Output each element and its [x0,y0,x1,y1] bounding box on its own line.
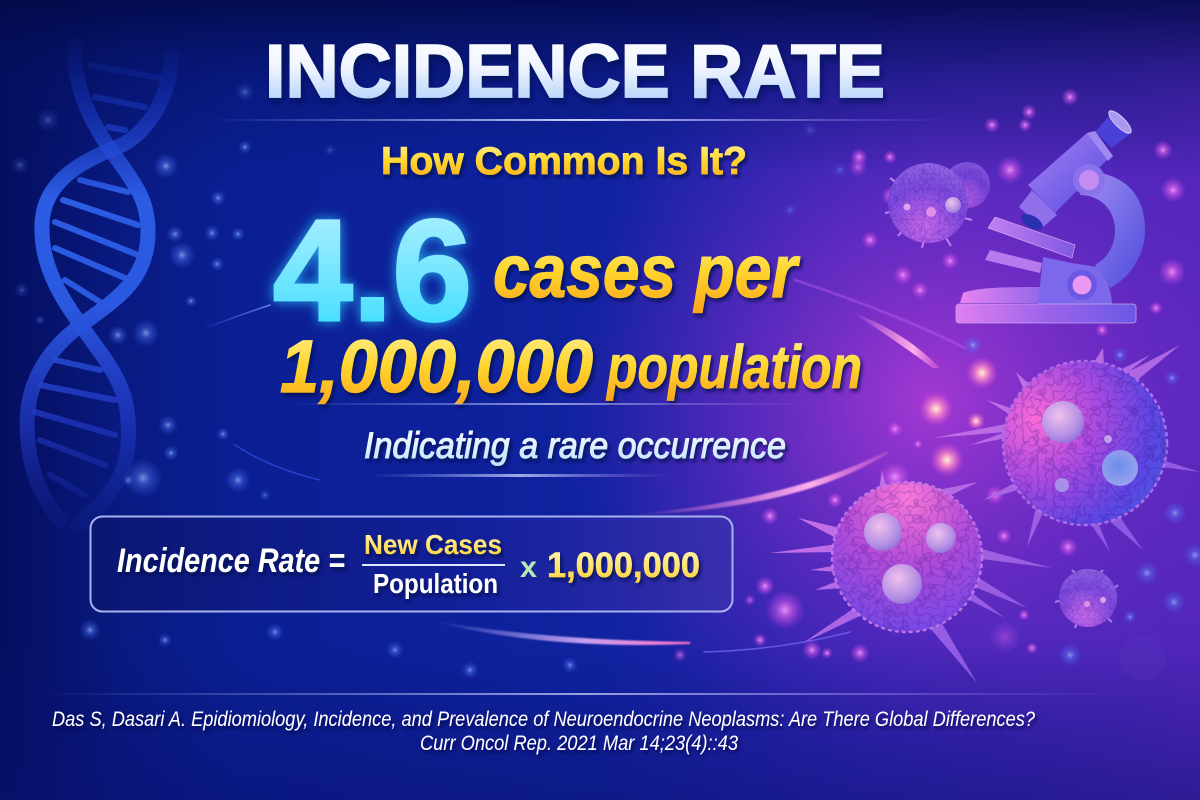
light streaks [200,280,965,652]
icon: large cell right [933,345,1200,552]
cases per: cases per [493,229,800,313]
microscope cap [1106,108,1134,136]
citation line two: Curr Oncol Rep. 2021 Mar 14;23(4)::43 [420,732,738,755]
icon: cell cluster top [885,162,990,248]
microscope focus knob [1073,164,1105,196]
microscope objective [1019,190,1057,228]
nuclei [1042,401,1084,443]
microscope tube [1028,133,1110,213]
microscope eyepiece [1095,115,1132,148]
microscope foot [960,287,1040,303]
icon: small cell [1055,569,1118,628]
footer divider [40,693,1130,695]
title divider [210,119,950,121]
rarity note: Indicating a rare occurrence [364,425,786,466]
glowing particles [11,82,1200,679]
multiplier: 1,000,000 [547,546,700,585]
numerator: New Cases [364,529,502,560]
citation line one: Das S, Dasari A. Epidiomiology, Incidence, and Prevalence of Neuroendocrine Neoplasms: Are There Global Differences? [52,708,1035,731]
spikes [933,345,1200,552]
formula label: Incidence Rate = [117,542,345,580]
icon: microscope [956,108,1145,323]
icon: faint cells [990,622,1166,681]
microscope lens [1019,211,1045,233]
icon: DNA helix [27,45,172,525]
microscope collar [1087,131,1113,161]
formula panel [90,516,732,612]
microscope lower stage [985,250,1042,273]
fraction bar [362,564,505,566]
spikes [770,470,1052,683]
icon: large cell left [770,470,1052,683]
divider [370,474,670,477]
citation [52,708,1035,755]
subtitle: How Common Is It? [381,140,747,183]
one million: 1,000,000 [280,325,593,408]
microscope pillar [1038,257,1112,304]
microscope stage [988,217,1075,258]
headline statistic [273,190,862,408]
front cell [885,163,972,248]
multiply sign: x [520,551,537,584]
divider [290,403,810,405]
rear cell [944,162,990,208]
population: population [605,333,862,401]
denominator: Population [373,568,498,599]
microscope base [956,304,1136,323]
nuclei [864,513,902,551]
microscope lower knob [1067,270,1097,300]
big number: 4.6 [273,190,472,351]
title: INCIDENCE RATE [265,29,885,113]
microscope arm [1080,172,1145,288]
